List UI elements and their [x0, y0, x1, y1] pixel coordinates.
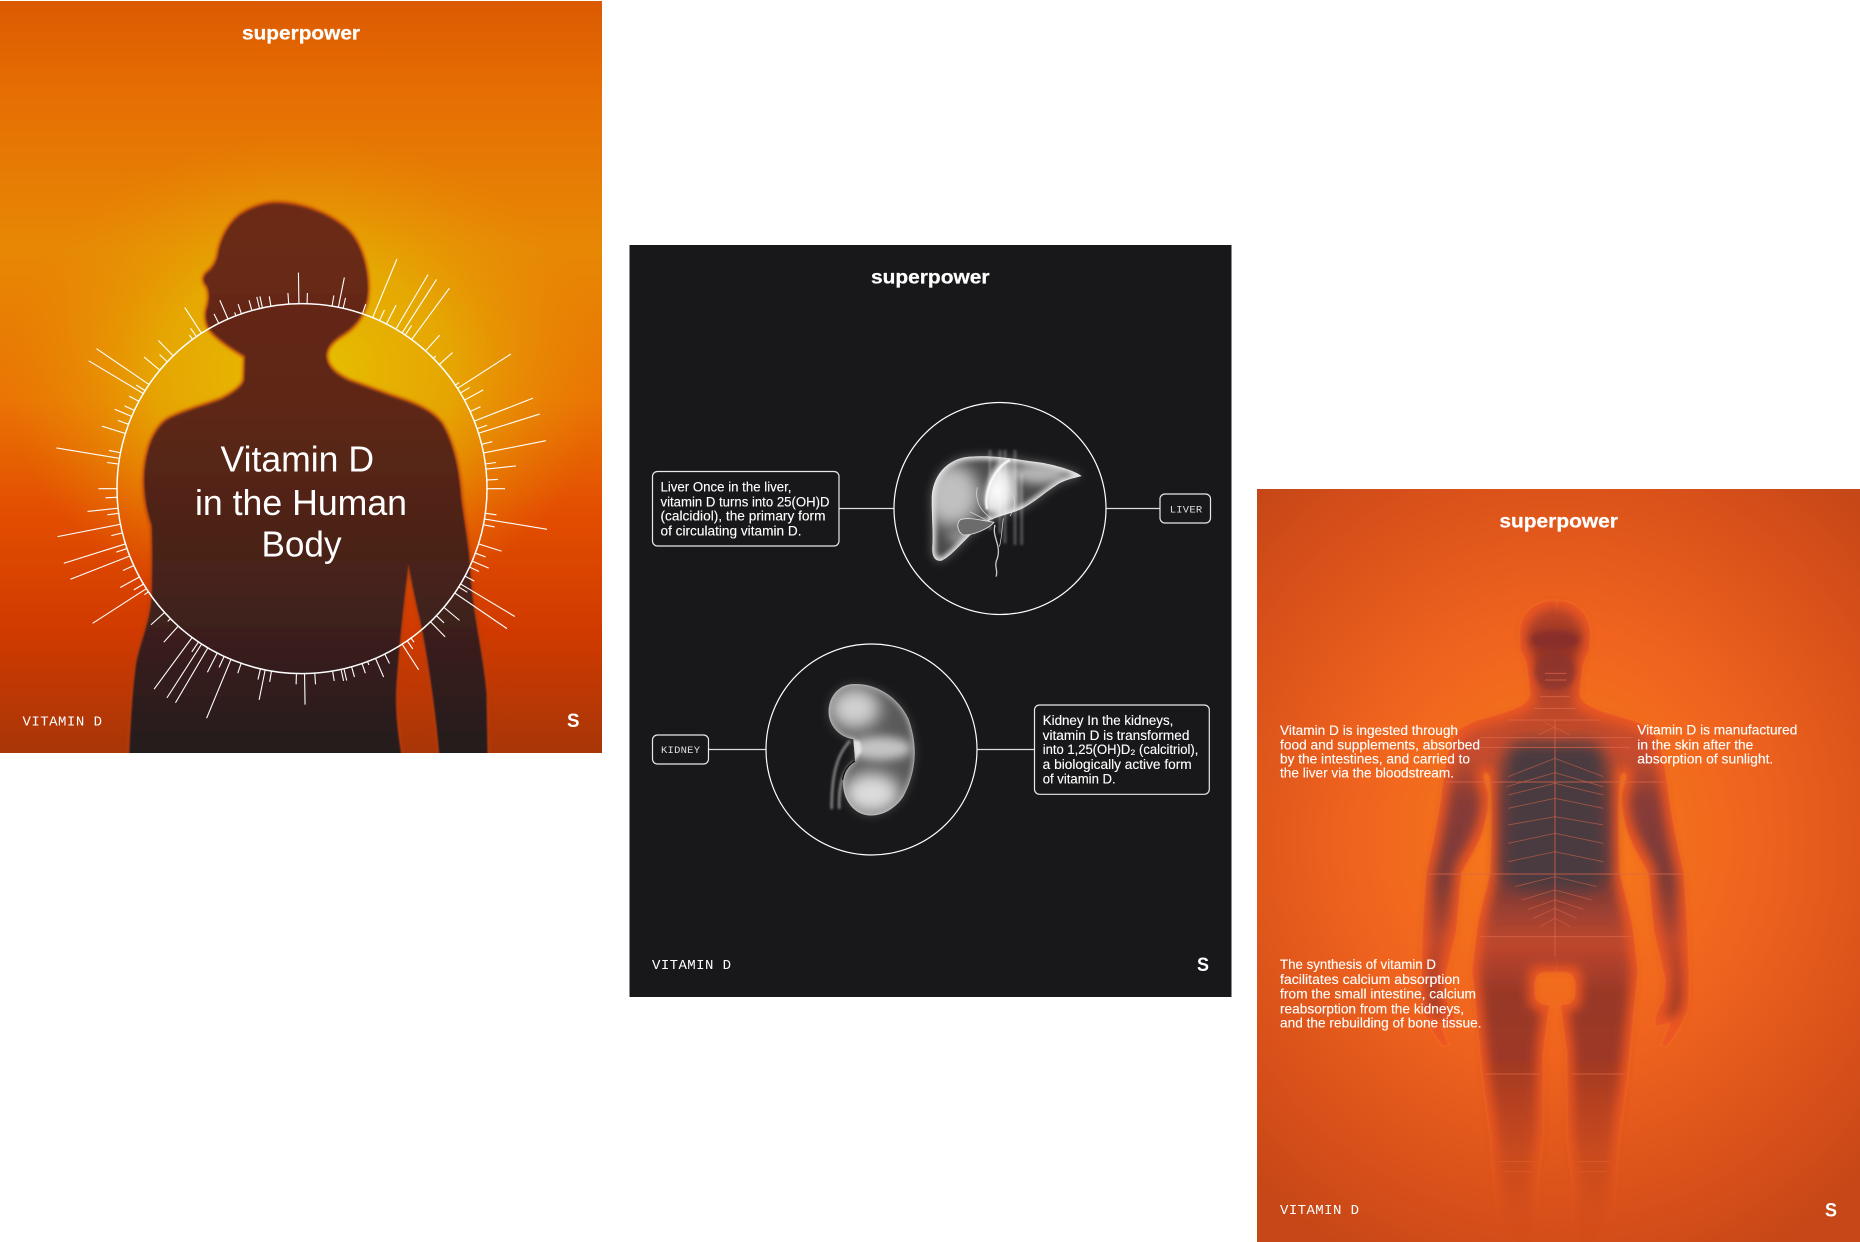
orange background — [1257, 489, 1860, 1242]
text: calcium: and the rebuilding of bone tissue. — [1280, 1016, 1482, 1031]
text: skin synthesis: in the skin after the — [1637, 737, 1753, 752]
logo: superpower — [871, 266, 990, 288]
kidney text box: vitamin D is transformed — [1043, 728, 1189, 743]
liver tag: LIVER — [1170, 504, 1203, 516]
kidney connectors — [708, 748, 1034, 750]
logo: superpower — [1499, 510, 1618, 532]
text: ingestion: by the intestines, and carried to — [1280, 751, 1470, 766]
kidney text box: Kidney In the kidneys, — [1043, 713, 1173, 728]
sun circle — [117, 304, 487, 674]
title: in the Human — [195, 482, 407, 523]
text: ingestion: the liver via the bloodstream. — [1280, 766, 1454, 781]
text: calcium: from the small intestine, calcium — [1280, 987, 1476, 1002]
footer label: VITAMIN D — [652, 958, 731, 974]
footer mark: S — [1825, 1200, 1837, 1222]
title: Body — [262, 524, 342, 564]
cover background gradient — [0, 1, 602, 753]
liver tag — [1160, 494, 1210, 523]
text: calcium: The synthesis of vitamin D — [1280, 957, 1436, 972]
text: ingestion — [1280, 723, 1480, 781]
logo: superpower — [242, 22, 360, 44]
title: Vitamin D — [220, 438, 374, 480]
liver connectors — [839, 508, 1160, 510]
text: ingestion: Vitamin D is ingested through — [1280, 723, 1458, 738]
kidney tag: KIDNEY — [661, 745, 701, 757]
text: calcium: facilitates calcium absorption — [1280, 972, 1460, 987]
footer mark: S — [1197, 955, 1209, 976]
text: calcium — [1280, 957, 1482, 1031]
icon: kidney — [829, 684, 915, 815]
liver text box: Liver Once in the liver, — [660, 480, 792, 494]
liver text box: of circulating vitamin D. — [660, 523, 802, 538]
kidney text box: of vitamin D. — [1043, 771, 1116, 786]
kidney text box: into 1,25(OH)D₂ (calcitriol), — [1043, 742, 1198, 757]
human body figure — [1421, 600, 1689, 1242]
kidney text box — [1034, 705, 1209, 794]
footer label: VITAMIN D — [1280, 1203, 1359, 1219]
dark background — [630, 245, 1232, 997]
text: skin synthesis: Vitamin D is manufactured — [1637, 722, 1797, 738]
text: skin synthesis — [1637, 722, 1797, 766]
liver text box — [652, 472, 839, 546]
man silhouette — [128, 203, 488, 775]
icon: liver — [923, 450, 1082, 577]
footer mark: S — [567, 711, 580, 732]
kidney tag — [652, 735, 708, 764]
sun glow — [46, 175, 563, 560]
text: skin synthesis: absorption of sunlight. — [1637, 751, 1773, 766]
title — [195, 438, 407, 564]
kidney text box: a biologically active form — [1043, 757, 1192, 772]
panel: cover — [0, 1, 602, 775]
liver text box: vitamin D turns into 25(OH)D — [660, 494, 830, 510]
text: ingestion: food and supplements, absorbed — [1280, 737, 1480, 752]
liver text box: (calcidiol), the primary form — [660, 508, 826, 524]
sun ray ticks — [56, 259, 547, 718]
kidney circle — [766, 644, 977, 855]
footer label: VITAMIN D — [22, 714, 102, 730]
panel: body — [1257, 489, 1860, 1242]
panel: liver and kidney — [630, 245, 1232, 997]
text: calcium: reabsorption from the kidneys, — [1280, 1001, 1464, 1016]
liver circle — [894, 402, 1106, 614]
